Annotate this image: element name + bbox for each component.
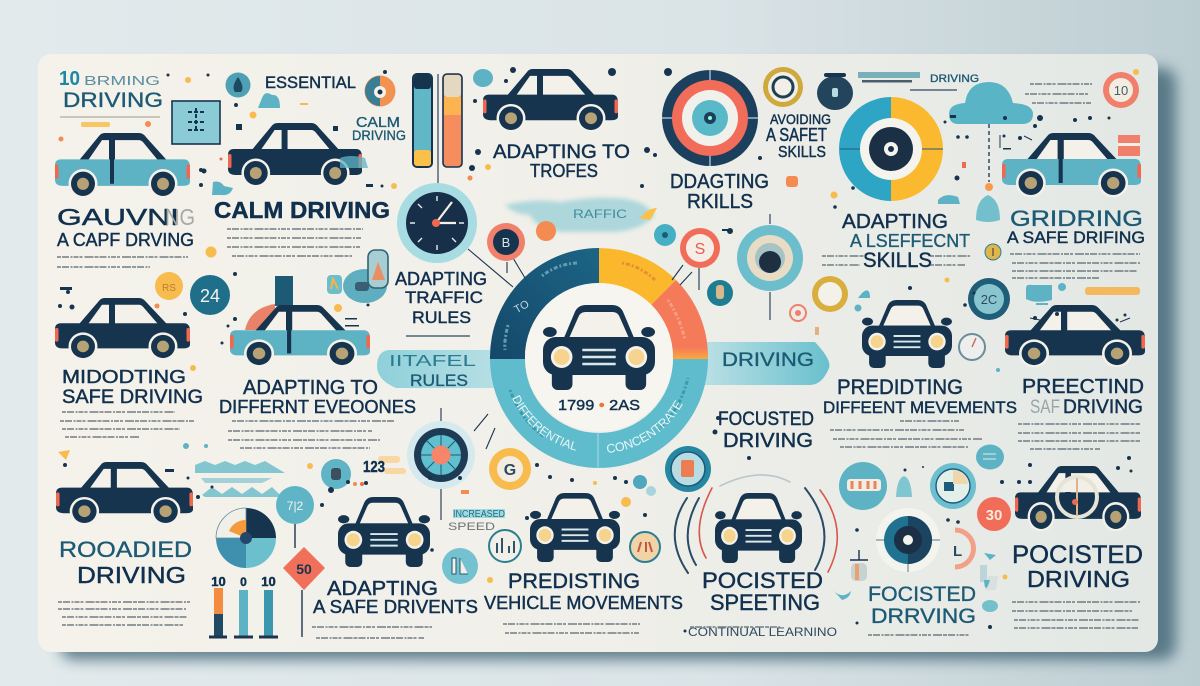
icon: road sign map (172, 101, 220, 144)
heading: calm driving small (352, 114, 406, 143)
icon: teal small dial (959, 334, 985, 360)
heading: adapting to different (219, 377, 416, 417)
heading: predidting: PREDIDTING (837, 376, 963, 399)
icon: tall block and coral arch (245, 276, 293, 330)
arcs around front car (675, 475, 837, 573)
scattered dots and marks (58, 67, 1139, 632)
banner: driving: DRIVING (722, 350, 814, 371)
banner: traffic rules: IITAFEL (389, 353, 476, 370)
heading: rooadied: ROOADIED (59, 537, 192, 562)
text: 123: 123 (363, 459, 385, 476)
ring label: to: TO (512, 298, 532, 316)
text: increased speed: INCREASED (453, 509, 505, 520)
icon: gold ring (812, 276, 848, 312)
icon: badge 24: 24 (200, 286, 220, 306)
gauge tubes (413, 74, 462, 167)
heading: calm driving small: DRIVING (352, 127, 406, 143)
icon: teal blobs (633, 475, 656, 496)
car 2 navy (228, 123, 362, 188)
icon: faint traffic wave (195, 461, 285, 497)
heading: predisting (484, 570, 683, 613)
heading: adapting skills (842, 211, 970, 272)
heading: focused driving: DRIVING (723, 430, 813, 452)
icon: yellow g badge: G (504, 462, 516, 479)
heading: adapting skills: A LSEFFECNT (850, 231, 970, 251)
heading: predisting: VEHICLE MOVEMENTS (484, 593, 683, 613)
heading: gridring (1007, 206, 1145, 247)
icon: central car (543, 305, 655, 390)
icon: coral and navy badge (487, 223, 525, 261)
icon: 2x badge (968, 278, 1010, 320)
icon: chart badge (489, 530, 521, 562)
icon: coral flag (1118, 135, 1140, 156)
icon: teal bell (896, 476, 912, 497)
icon: teal dot (654, 224, 676, 246)
bar chart (209, 574, 278, 637)
heading: top driving: DRIVING (930, 73, 979, 85)
car 4 teal (1002, 133, 1141, 198)
heading: predidting: DIFFEENT MEVEMENTS (823, 398, 1017, 417)
car 5 navy (55, 298, 190, 360)
heading: midodting: MIDODTING (62, 367, 186, 387)
heading: avoiding safet skills: AVOIDING (770, 111, 831, 127)
icon: small gold coin (985, 244, 1001, 260)
icon: teal speech bubble (976, 444, 1004, 470)
central ring chart (490, 248, 708, 468)
heading: gauvning: GAUVNI (57, 204, 179, 230)
heading: adapting safe: A SAFE DRIVENTS (313, 597, 478, 617)
ring labels: DIFFERENTIAL (512, 395, 576, 451)
front car 2 (530, 493, 620, 562)
car 3 navy (483, 69, 618, 132)
icon: faded traffic blot: RAFFIC (573, 207, 627, 221)
icon: teal number badge (321, 459, 351, 489)
icon: teal pill strip (1026, 283, 1140, 302)
heading: focused driving: FOCUSTED (718, 409, 814, 430)
icon: parking meter badge (839, 462, 887, 510)
icon: seatbelt cluster (343, 250, 388, 303)
body text blocks (57, 84, 1140, 638)
ring labels: CONCENTRATE (607, 400, 683, 453)
title block (59, 68, 163, 127)
text: ring date: 1799 • 2AS (558, 397, 640, 414)
icon: yellow badge: RS (162, 283, 176, 294)
icon: coral and navy badge: B (502, 235, 510, 250)
heading: gridring: A SAFE DRIFING (1007, 228, 1145, 247)
heading: adapting traffic rules (395, 269, 487, 336)
heading: ddacting rkills: RKILLS (687, 191, 753, 213)
heading: avoiding safet skills: SKILLS (778, 144, 826, 161)
heading: preectind: DRIVING (1063, 397, 1143, 418)
heading: gauvning (57, 204, 195, 250)
icon: round document badge (665, 446, 711, 492)
icon: yellow g badge (489, 448, 531, 490)
icon: yellow ring (763, 67, 803, 107)
heading: pocisted speeting (702, 568, 823, 615)
icon: badge 24 (190, 275, 230, 315)
icon: target (662, 70, 758, 166)
heading: midodting (62, 367, 203, 408)
text: increased speed (448, 509, 505, 533)
heading: midodting: SAFE DRIVING (62, 387, 203, 408)
icon: sign post 7|2 (276, 486, 314, 548)
text: increased speed: SPEED (448, 521, 495, 533)
icon: clock dial (397, 183, 477, 263)
ring labels (512, 395, 683, 453)
heading: adapting to trofes: TROFES (530, 161, 598, 181)
bar chart: 10 (211, 574, 226, 589)
front car 1 (338, 497, 430, 567)
icon: L coral arc: L (953, 543, 962, 560)
title block: BRMING (84, 73, 160, 88)
heading: predidting (823, 376, 1017, 417)
heading: gauvning: A CAPF DRVING (57, 230, 194, 250)
icon: teal badge (442, 548, 478, 584)
icon: teal jar cluster (980, 565, 998, 612)
icon: padlock (817, 73, 853, 110)
heading: rooadied: DRIVING (77, 562, 186, 588)
heading: adapting safe: ADAPTING (327, 578, 438, 600)
front car 4 (862, 300, 952, 368)
heading: ddacting rkills: DDAGTING (670, 171, 769, 193)
car 1 teal (55, 133, 190, 199)
heading: preectind (1022, 376, 1144, 418)
icon: top teal drop (226, 72, 250, 98)
icon: screen dial (930, 463, 976, 509)
heading: adapting skills: SKILLS (863, 249, 932, 272)
heading: gauvning: NG (165, 204, 195, 230)
title block: DRIVING (63, 89, 163, 112)
heading: adapting to trofes: ADAPTING TO (493, 142, 630, 163)
icon: teal tile (327, 275, 342, 294)
heading: pocisted speeting: SPEETING (710, 590, 820, 615)
banner: traffic rules (377, 350, 520, 390)
heading: focisted: FOCISTED (868, 583, 976, 606)
connector lines (438, 74, 770, 520)
banner: driving (690, 342, 829, 385)
icon: teal shield gauge (737, 225, 803, 291)
heading: adapting traffic rules: RULES (412, 308, 471, 327)
icon: compass wheel (407, 421, 475, 489)
heading: ddacting rkills (670, 171, 769, 213)
text: continual learning: CONTINUAL LEARNINO (688, 625, 837, 639)
title block: 10 (59, 68, 80, 90)
heading: pocisted speeting: POCISTED (702, 568, 823, 593)
icon: two-tone dial (839, 97, 943, 201)
icon: top right number badge: 10 (1114, 83, 1128, 98)
heading: calm driving small: CALM (356, 114, 400, 131)
icon: yellow badge (155, 272, 183, 300)
heading: pocisted driving: DRIVING (1027, 566, 1130, 592)
heading: preectind: SAF (1030, 397, 1060, 418)
heading: rooadied (59, 537, 192, 588)
icon: cloud (949, 82, 1033, 222)
icon: 2x badge: 2C (981, 292, 997, 307)
heading: adapting to different: ADAPTING TO (243, 377, 378, 399)
heading: adapting to trofes (493, 142, 630, 181)
heading: adapting safe (313, 578, 478, 617)
heading: essential: ESSENTIAL (265, 73, 356, 92)
icon: top right number badge (1103, 72, 1139, 108)
icon: large teal-navy dial (876, 508, 940, 572)
car 9 navy with steering wheel (1015, 466, 1141, 532)
bar chart: 0 (240, 575, 247, 589)
icon: coral S badge (680, 228, 720, 268)
car 8 navy (1005, 305, 1145, 367)
heading: predisting: PREDISTING (508, 570, 640, 593)
icon: coral S badge: S (695, 241, 705, 258)
front car 3 (715, 493, 802, 563)
heading: focused driving (718, 409, 814, 452)
icon: sign post 7|2: 7|2 (287, 499, 304, 513)
car 6 teal (230, 305, 370, 367)
heading: focisted: DRRVING (871, 605, 976, 628)
icon: orange chart badge (630, 532, 660, 562)
heading: avoiding safet skills (766, 111, 831, 161)
icon: teal pin (707, 280, 733, 306)
icon: person tool (850, 550, 868, 581)
heading: avoiding safet skills: A SAFET (766, 125, 827, 145)
icon: L coral arc (953, 530, 974, 567)
icon: coral 30 badge: 30 (986, 507, 1002, 524)
icon: diamond speed sign: 50 (296, 561, 312, 577)
heading: pocisted driving (1012, 541, 1143, 592)
heading: adapting traffic rules: ADAPTING (395, 269, 487, 289)
text: 123 (363, 456, 406, 476)
heading: top driving (858, 72, 979, 90)
icon: faded traffic blot (505, 198, 657, 241)
heading: pocisted driving: POCISTED (1012, 541, 1143, 569)
heading: adapting to different: DIFFERNT EVEOONES (219, 397, 416, 417)
icon: diamond speed sign (283, 547, 325, 637)
pie chart (216, 508, 276, 568)
heading: preectind: PREECTIND (1022, 376, 1144, 398)
heading: calm driving: CALM DRIVING (214, 197, 390, 223)
icon: coral 30 badge (977, 497, 1011, 531)
ring marks (505, 263, 688, 437)
banner: traffic rules: RULES (410, 371, 468, 390)
heading: adapting traffic rules: TRAFFIC (405, 288, 483, 307)
heading: adapting skills: ADAPTING (842, 211, 948, 233)
heading: focisted (868, 583, 976, 628)
bar chart: 10 (261, 574, 276, 589)
heading: gridring: GRIDRING (1010, 206, 1143, 231)
car 7 navy (56, 462, 193, 525)
icon: orange lens (364, 76, 396, 106)
